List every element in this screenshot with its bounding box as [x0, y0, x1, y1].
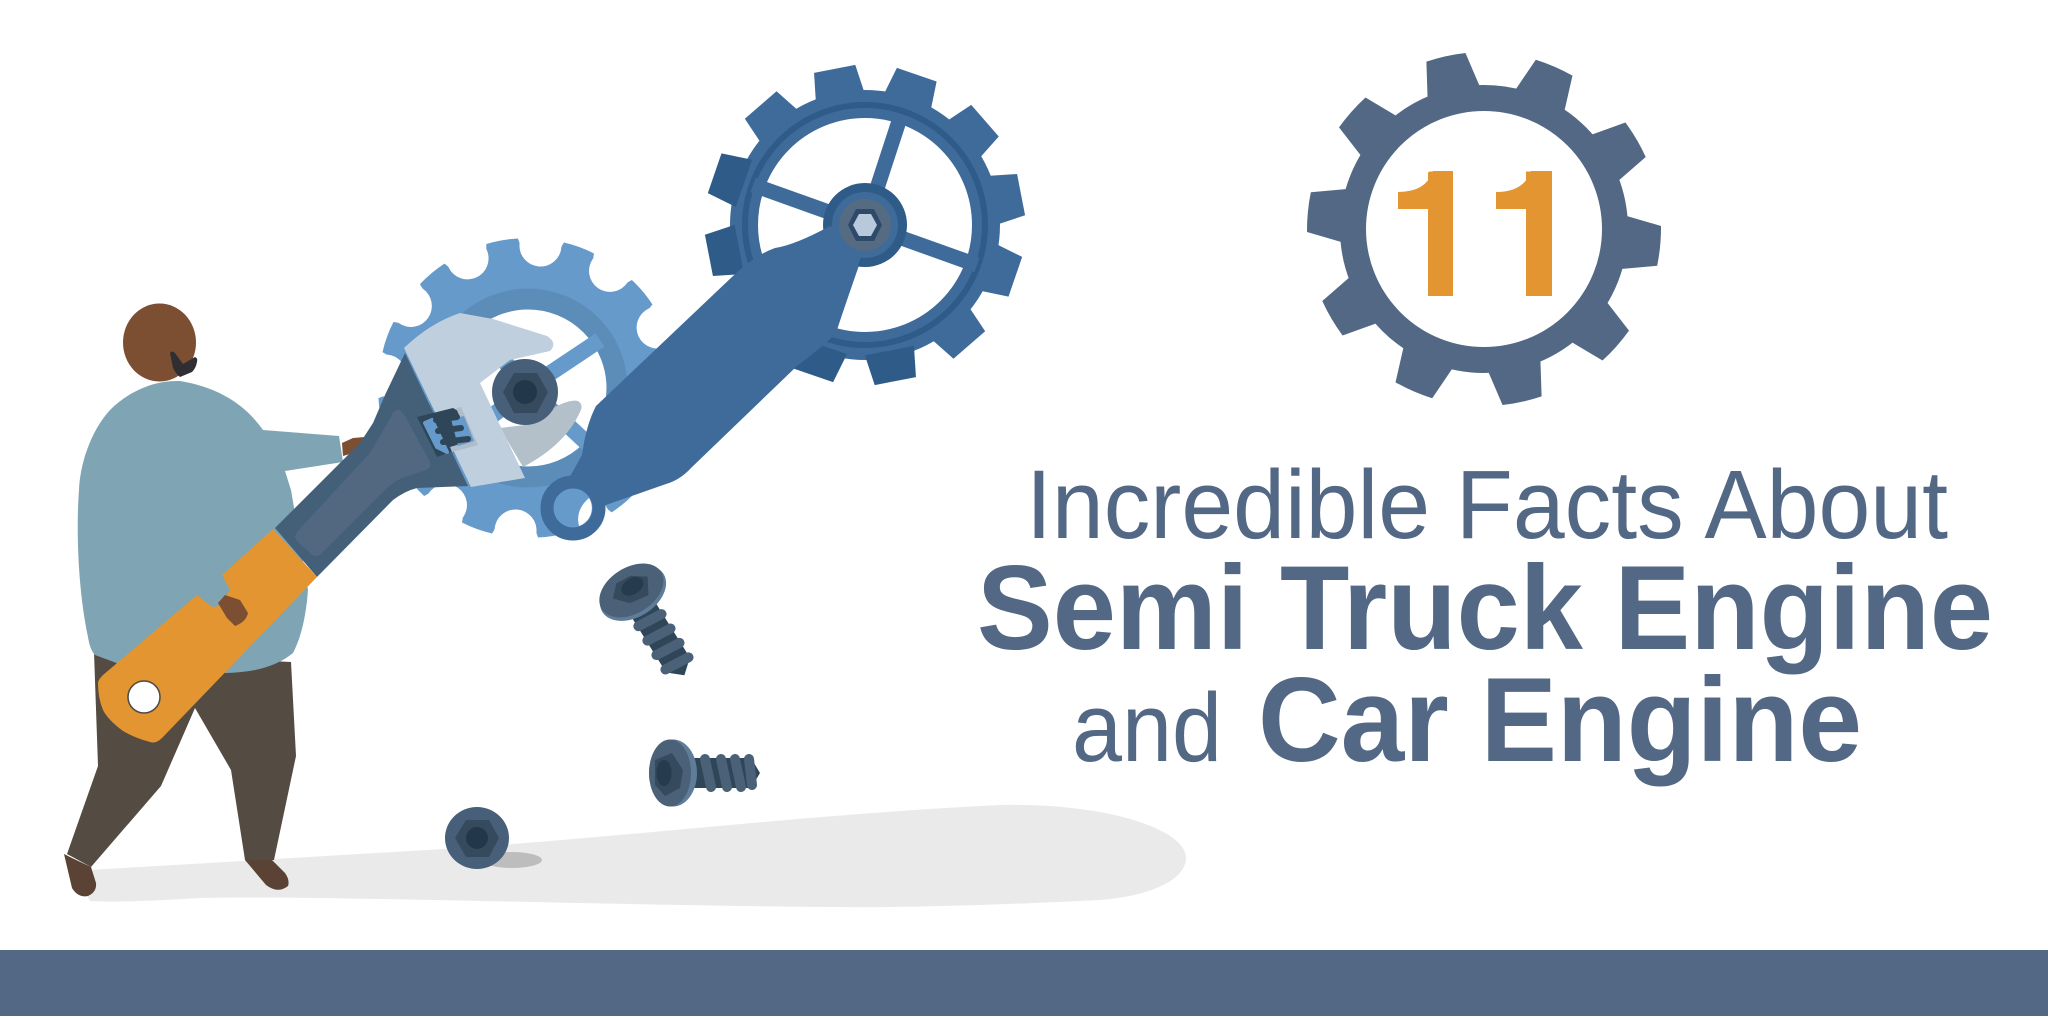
title line 1: Incredible Facts About — [1026, 450, 1948, 559]
hub and hex nut — [832, 192, 898, 258]
screw falling — [589, 552, 715, 694]
wrench handle — [275, 353, 468, 577]
wrench arm — [547, 226, 868, 534]
screw on side — [649, 740, 760, 806]
words Car Engine: Car Engine — [1258, 653, 1862, 787]
title line 3 — [1072, 653, 1862, 787]
bolt in wrench — [492, 359, 558, 425]
icon: dark blue gear — [704, 64, 1026, 386]
person: right shoe — [245, 860, 289, 890]
screw head shadow — [482, 852, 542, 868]
bolt on ground — [445, 807, 509, 869]
ground shadow — [85, 805, 1186, 907]
icon: numbered gear — [1305, 50, 1663, 408]
arm pivot ring — [547, 482, 599, 534]
number 11: 11 — [1386, 133, 1573, 335]
handle inner panel — [295, 410, 430, 556]
person: trousers — [67, 652, 296, 867]
bottom bar — [0, 950, 2048, 1016]
person: left shoe — [64, 854, 96, 896]
icon: light blue gear — [363, 223, 693, 553]
wrench upper jaw — [404, 313, 553, 487]
person: hand on grip — [218, 595, 248, 626]
grip hole — [128, 681, 160, 713]
word and: and — [1072, 673, 1222, 782]
person: head — [123, 304, 197, 382]
wrench lower jaw — [500, 401, 582, 467]
title — [977, 450, 1993, 787]
number 11 — [1398, 171, 1552, 296]
wrench adjusting knob — [417, 407, 478, 457]
wrench orange grip — [98, 529, 317, 742]
person: hand on wrench — [342, 437, 365, 456]
person: body and sleeve — [78, 381, 343, 673]
title line 2: Semi Truck Engine — [977, 541, 1993, 675]
